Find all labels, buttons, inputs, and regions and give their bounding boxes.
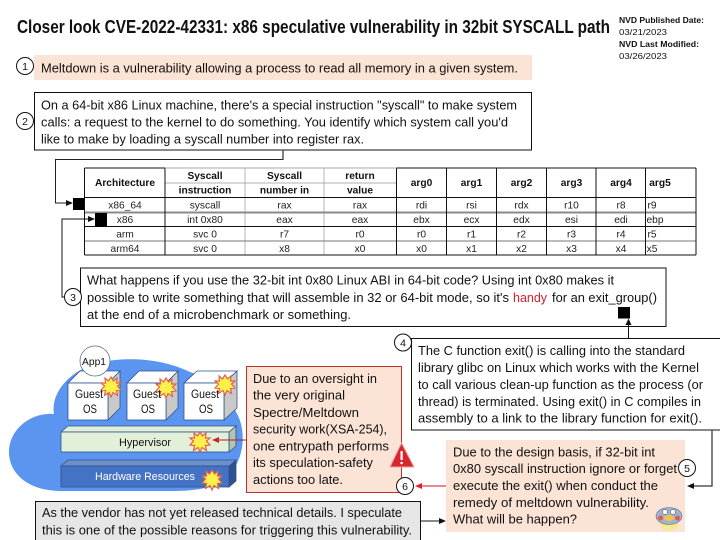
App1 bubble [80,346,110,376]
table: syscall ABI registers: arm64 [111,244,140,255]
panel: speculation note: this is one of the possible reasons for triggering this vulnerability. [42,522,412,538]
guest OS 3 label: Guest [191,389,220,401]
marker: x86_64 black square [73,198,84,210]
table: syscall ABI registers: rax [277,200,292,212]
panel: step 4 exit function explanation: thread) is terminated. Using exit() in C compiles in [418,394,701,409]
table: syscall ABI registers: r9 [647,200,657,212]
cloud virtualization diagram [9,346,243,491]
panel: step 5 question: remedy of meltdown vulnerability. [453,495,649,510]
table: syscall ABI registers: number in [260,186,309,196]
arrow: step 4 to exit_group [626,318,632,338]
table: syscall ABI registers: edx [513,215,530,226]
arrow: step 5 to step 6 [415,483,446,489]
table: syscall ABI registers: return [345,171,375,182]
panel: step 3 int 0x80 question: at the end of a microbenchmark or something. [87,307,351,322]
hypervisor layer [61,426,236,452]
table: syscall ABI registers: x2 [516,244,527,255]
table: syscall ABI registers: Syscall [267,171,302,182]
table: syscall ABI registers: Syscall [187,171,223,182]
table: syscall ABI registers: r0 [355,230,365,240]
panel: step 4 exit function explanation: library glibc on Linux which works with the Kernel [418,360,699,375]
panel: step 5 question [446,440,685,532]
guest OS 1 label [75,389,104,416]
arrow: speculation note to step 5 [420,518,446,524]
guest OS 3 label [191,389,220,416]
panel: step 5 question: What will be happen? [453,512,577,526]
table: syscall ABI registers: arg4 [610,178,632,189]
table: syscall ABI registers: r7 [280,230,289,240]
cube: guest OS 2 [127,371,178,420]
panel: oversight note: Due to an oversight in [253,371,377,386]
table: syscall ABI registers: arg0 [411,178,433,189]
step marker 5 [678,460,696,476]
table: syscall ABI registers: arg1 [461,178,483,189]
arrow: step 3 to x86 row [62,216,95,297]
table: syscall ABI registers: ecx [464,215,479,226]
table: syscall ABI registers: value [347,186,373,196]
panel: step 2 syscall explanation: like to make by loading a syscall number into register rax. [41,132,364,146]
panel: step 5 question: Due to the design basis, if 32-bit int [453,444,655,460]
table: syscall ABI registers: eax [276,215,293,226]
panel: speculation note: As the vendor has not yet released technical details. I speculate [42,505,402,520]
panel: step 3 int 0x80 question: for an exit_group() [552,290,657,305]
table: syscall ABI registers: x3 [566,244,577,255]
table: syscall ABI registers: x8 [279,244,290,255]
panel: step 3 int 0x80 question: possible to write something that will assemble in 32 or 64-bit mode, so it's [87,290,509,305]
guest OS 3 label: OS [199,404,213,416]
cube: guest OS 1 [68,371,120,420]
table: syscall ABI registers: x86 [117,215,134,226]
App1 bubble: App1 [82,357,106,368]
table: syscall ABI registers: x86_64 [108,200,142,212]
panel: speculation note [36,502,420,540]
table: syscall ABI registers: int 0x80 [187,215,223,226]
hardware label: Hardware Resources [95,471,195,483]
panel: step 5 question: execute the exit() when conduct the [453,478,658,493]
step marker 3 [64,288,82,306]
step marker 2: 2 [22,116,28,128]
icon: warning triangle [390,443,414,467]
table: syscall ABI registers: x0 [355,244,366,255]
arrow: step 4 to step 5 [687,430,712,489]
table: syscall ABI registers: instruction [179,186,231,196]
table: syscall ABI registers: svc 0 [193,244,217,255]
icon: worried bird mascot [656,508,682,530]
table: syscall ABI registers: r5 [647,230,657,240]
table: syscall ABI registers: r4 [616,230,626,240]
NVD dates [619,15,704,61]
table: syscall ABI registers: arm [116,230,134,240]
table: syscall ABI registers: r1 [467,230,476,240]
panel: oversight note: the very original [253,388,345,402]
table: syscall ABI registers: edi [614,215,628,226]
panel: step 3 int 0x80 question [80,268,666,326]
panel: oversight note [246,366,402,492]
table: syscall ABI registers: eax [352,215,368,226]
step marker 4 [394,334,412,351]
table: syscall ABI registers: x0 [416,244,427,255]
guest OS 2 label: OS [141,404,155,416]
guest OS 2 label: Guest [133,389,162,401]
panel: step 2 syscall explanation [34,92,532,150]
table: syscall ABI registers: rax [353,200,367,212]
table: syscall ABI registers: svc 0 [193,230,217,240]
panel: oversight note: its speculation-safety [253,455,373,470]
panel: step 3 int 0x80 question: What happens if you use the 32-bit int 0x80 Linux ABI in 64-bit code? Using int 0x80 makes it [87,272,614,288]
table: syscall ABI registers: rdx [514,200,529,212]
table: syscall ABI registers: r3 [567,230,576,240]
table: syscall ABI registers: syscall [190,200,220,212]
panel: oversight note: actions too late. [253,472,343,487]
NVD dates: NVD Last Modified: [619,39,699,49]
panel: step 1 Meltdown definition: Meltdown is a vulnerability allowing a process to read all memory in a given system. [41,60,518,76]
panel: oversight note: Spectre/Meltdown [253,405,359,420]
table: syscall ABI registers: Architecture [95,178,155,189]
guest OS 2 label [133,389,162,416]
cloud background [9,359,243,491]
table: syscall ABI registers: r8 [616,200,626,212]
table: syscall ABI registers: rdi [416,200,427,212]
explosion: hardware [202,470,222,490]
panel: step 3 int 0x80 question: handy [513,290,547,305]
hardware layer [61,460,236,487]
table: syscall ABI registers: arg2 [511,178,533,189]
explosion: guest OS 1 [101,377,121,397]
guest OS 1 label: Guest [75,389,104,401]
panel: oversight note: one entrypath performs [253,438,390,454]
panel: step 1 Meltdown definition [34,55,532,80]
table: syscall ABI registers: ebp [646,215,664,226]
table: syscall ABI registers: x4 [616,244,627,255]
marker: exit_group black square [618,307,630,318]
explosion: hypervisor [190,432,210,452]
step marker 2 [16,112,34,130]
panel: step 4 exit function explanation: to call various clean-up function as the process (or [418,377,704,392]
table: syscall ABI registers: r2 [517,230,526,240]
arrow: step 2 to x86_64 row [56,150,283,206]
step marker 3: 3 [70,292,76,304]
step marker 6 [396,478,414,494]
step marker 6: 6 [402,481,408,493]
panel: step 4 exit function explanation [412,338,720,430]
table: syscall ABI registers: rsi [466,200,477,212]
panel: step 5 question: 0x80 syscall instruction ignore or forget [453,461,677,476]
title: Closer look CVE-2022-42331: x86 speculative vulnerability in 32bit SYSCALL path [17,17,610,37]
guest OS 1 label: OS [83,404,97,416]
hypervisor label: Hypervisor [119,437,171,449]
panel: step 2 syscall explanation: calls: a request to the kernel to do something. You identify which system call you'd [41,114,508,130]
cube: guest OS 3 [184,371,237,420]
table: syscall ABI registers [84,168,696,255]
table: syscall ABI registers: ebx [413,215,430,226]
marker: x86 black square [95,213,107,227]
NVD dates: 03/26/2023 [619,51,667,61]
panel: step 2 syscall explanation: On a 64-bit x86 Linux machine, there's a special instruction "syscall" to make system [41,98,517,112]
table: syscall ABI registers: arg3 [561,178,583,189]
explosion: guest OS 2 [156,378,176,398]
panel: oversight note: security work(XSA-254), [253,422,387,436]
panel: step 4 exit function explanation: assembly to a link to the library function for exit(). [418,410,702,426]
step marker 1: 1 [22,61,28,73]
table: syscall ABI registers: arg5 [649,178,671,189]
step marker 5: 5 [684,463,690,475]
arrow: oversight note to hypervisor [212,437,247,443]
NVD dates: NVD Published Date: [619,15,704,25]
explosion: guest OS 3 [215,375,235,395]
table: syscall ABI registers: x1 [466,244,477,255]
table: syscall ABI registers: r0 [417,230,426,240]
panel: step 4 exit function explanation: The C function exit() is calling into the standard [418,343,685,358]
step marker 4: 4 [400,338,406,350]
NVD dates: 03/21/2023 [619,27,667,37]
step marker 1 [16,58,34,74]
table: syscall ABI registers: esi [565,215,578,226]
table: syscall ABI registers: r10 [564,200,579,212]
table: syscall ABI registers: x5 [647,244,658,255]
